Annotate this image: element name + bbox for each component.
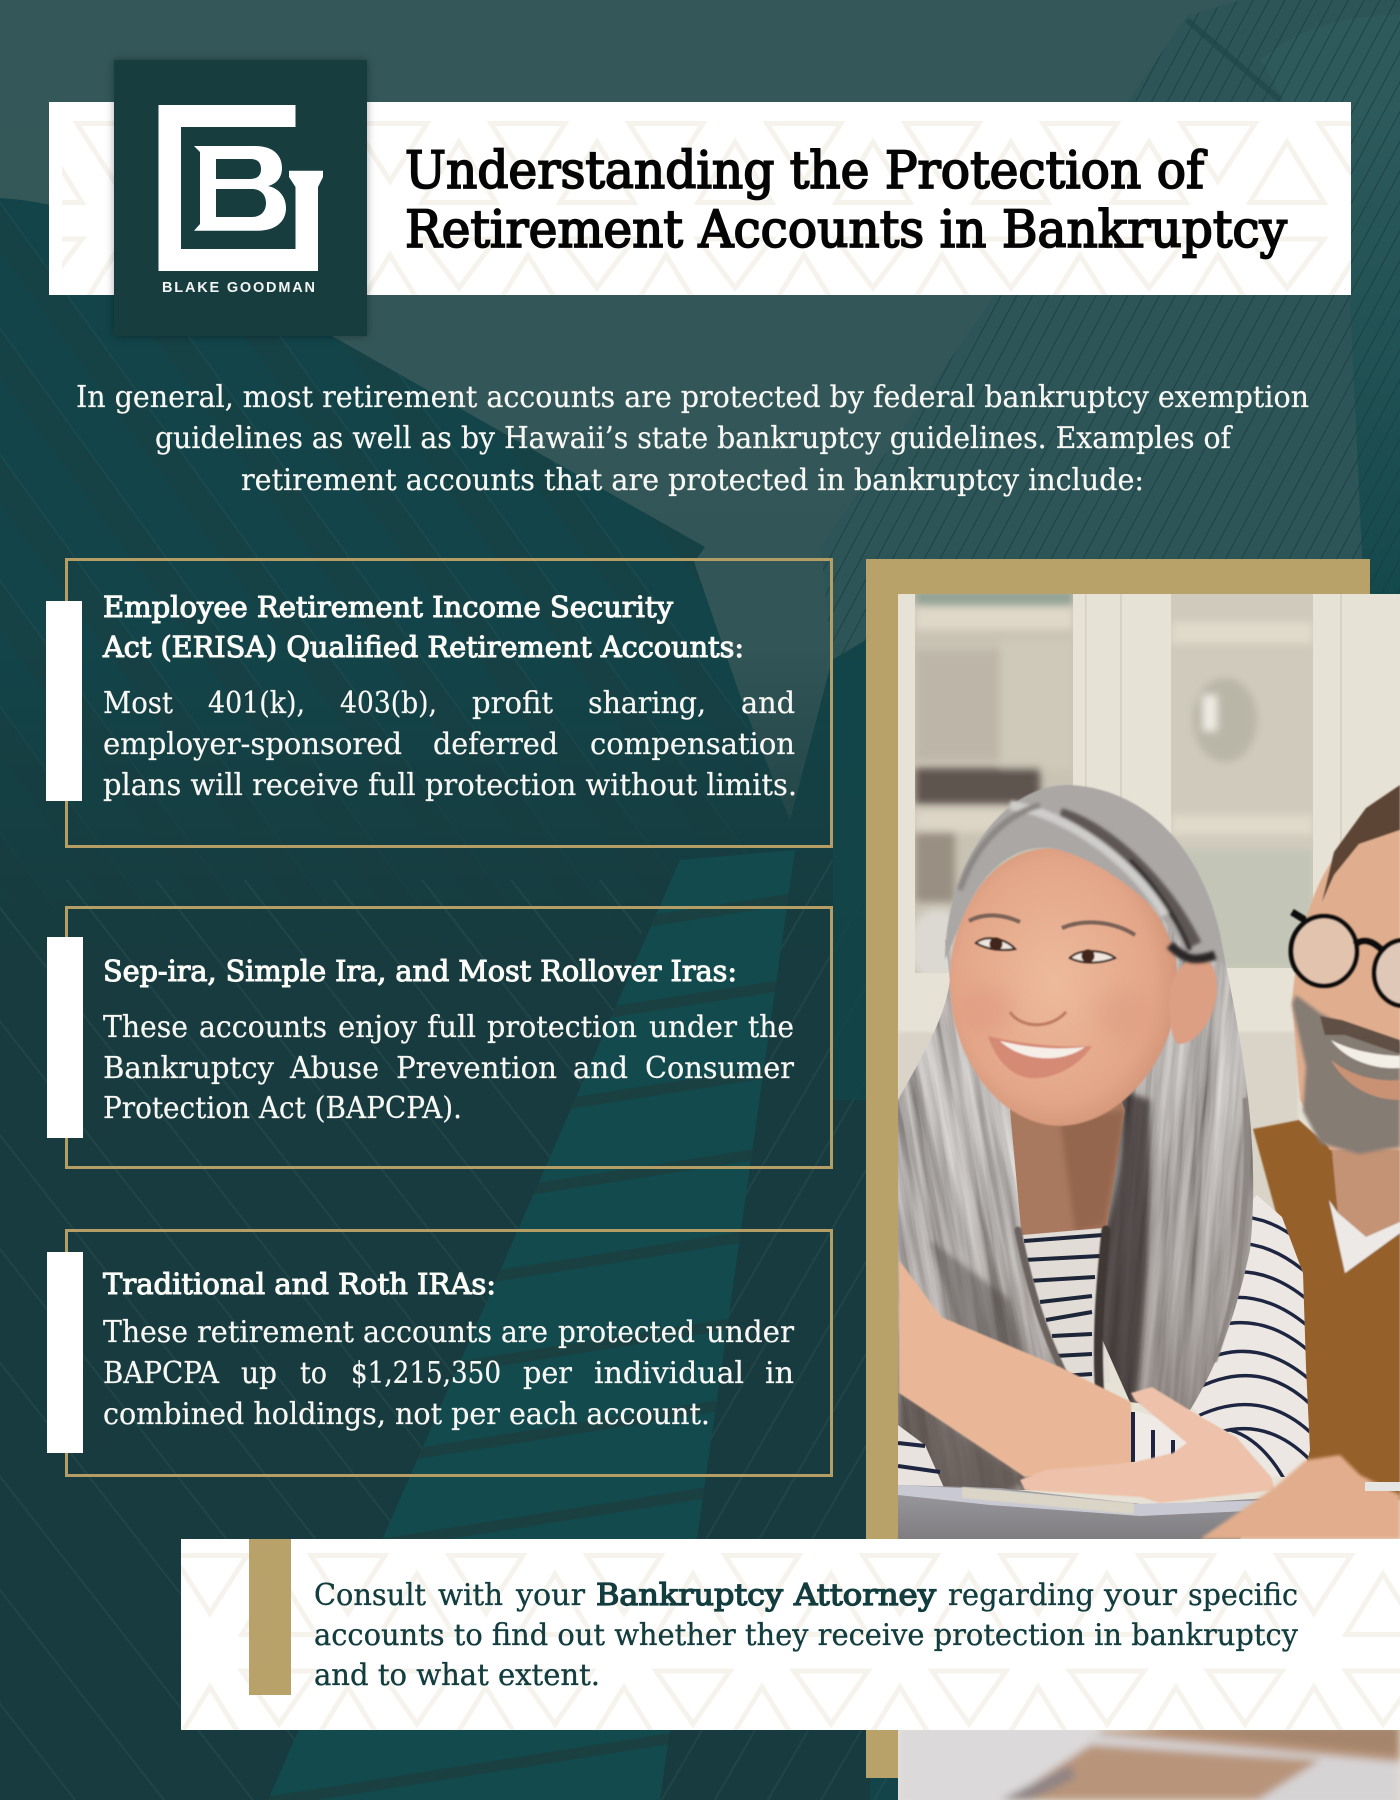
card text: $1,215,350 (351, 1356, 501, 1390)
woman: long grey hair left (898, 940, 1057, 1490)
card text (102, 590, 797, 802)
card text: up (241, 1356, 277, 1390)
title text: Understanding the Protection of (405, 142, 1207, 201)
card: SEP-IRA accounts (47, 906, 833, 1169)
card text: employer-sponsored (103, 727, 402, 761)
card text: Most (103, 686, 173, 720)
card text: These (103, 1315, 188, 1349)
card text: Protection Act (BAPCPA). (103, 1091, 462, 1125)
card text: to (300, 1356, 327, 1390)
photograph (898, 594, 1400, 1800)
card text: accounts (363, 1315, 492, 1349)
card text: Abuse (289, 1051, 379, 1085)
gold accent bar (249, 1539, 291, 1695)
intro paragraph (76, 380, 1309, 497)
card text: sharing, (588, 686, 706, 720)
intro paragraph: guidelines as well as by Hawaii’s state bankruptcy guidelines. Examples of (155, 421, 1233, 455)
kitchen cabinets (908, 590, 1073, 981)
card text: under (649, 1010, 737, 1044)
right building hatched (821, 0, 1400, 900)
card text: full (427, 1010, 476, 1044)
card text: Consumer (645, 1051, 794, 1085)
teal facade (270, 850, 795, 1800)
callout text (314, 1578, 1298, 1692)
callout text: with (438, 1578, 503, 1612)
card text: retirement (197, 1315, 354, 1349)
callout banner: consult your attorney (181, 1539, 1400, 1730)
white accent bar (47, 937, 83, 1138)
card: ERISA accounts (46, 558, 833, 848)
photo panel with gold frame: smiling couple (866, 559, 1400, 1800)
card text: and (741, 686, 795, 720)
intro paragraph: In general, most retirement accounts are protected by federal bankruptcy exemption (76, 380, 1309, 414)
card: Traditional and Roth IRAs (47, 1229, 833, 1477)
callout text: specific (1188, 1578, 1298, 1612)
cuff (1132, 1410, 1190, 1463)
card text: Traditional and Roth IRAs: (103, 1267, 496, 1301)
callout text: accounts to find out whether they receive protection in bankruptcy (314, 1618, 1298, 1652)
card text: combined holdings, not per each account. (103, 1397, 710, 1431)
bottom-left shirt (898, 1425, 945, 1490)
card text: accounts (199, 1010, 327, 1044)
card text: plans will receive full protection without limits. (103, 768, 797, 802)
man's hand (1020, 1387, 1275, 1503)
woman: sleeve (1187, 1195, 1310, 1477)
card text: Bankruptcy (103, 1051, 274, 1085)
lower photo strip: paperwork (898, 1725, 1400, 1800)
card text: enjoy (338, 1010, 417, 1044)
logo: Blake Goodman: BLAKE GOODMAN (162, 280, 315, 296)
card text: in (765, 1356, 794, 1390)
woman: facial features (969, 915, 1135, 1078)
card text: protected (558, 1315, 695, 1349)
card text: and (573, 1051, 628, 1085)
woman: arm (899, 1260, 1134, 1477)
title text: Retirement Accounts in Bankruptcy (405, 201, 1287, 260)
clipboard (898, 1485, 1270, 1539)
callout text: Bankruptcy (596, 1578, 783, 1612)
card text: Act (ERISA) Qualified Retirement Accounts: (102, 630, 744, 664)
white accent bar (46, 601, 82, 801)
card text (102, 1267, 794, 1431)
title banner (49, 102, 1351, 295)
card text: Employee Retirement Income Security (103, 590, 673, 624)
card text: the (748, 1010, 794, 1044)
title text (405, 142, 1287, 260)
callout text: regarding (948, 1578, 1094, 1612)
callout text: Attorney (793, 1578, 936, 1612)
card text: Sep-ira, Simple Ira, and Most Rollover Iras: (103, 954, 737, 988)
gold frame (866, 559, 1370, 1778)
woman: neck and shirt (1010, 1101, 1125, 1236)
card text: under (706, 1315, 794, 1349)
card text: per (523, 1356, 572, 1390)
callout text: and to what extent. (314, 1658, 600, 1692)
logo: Blake Goodman (114, 60, 367, 336)
callout text: Consult (314, 1578, 426, 1612)
card text: Prevention (396, 1051, 557, 1085)
card text: are (501, 1315, 548, 1349)
card text: individual (594, 1356, 744, 1390)
card text (103, 954, 794, 1125)
card text: protection (487, 1010, 637, 1044)
card text: These (103, 1010, 188, 1044)
woman: soft strands over shirt edges (1018, 1100, 1247, 1400)
other hand (1200, 1455, 1400, 1539)
card text: BAPCPA (103, 1356, 220, 1390)
card text: profit (472, 686, 553, 720)
left building (0, 198, 900, 1800)
card text: 403(b), (340, 686, 437, 720)
card text: deferred (433, 727, 558, 761)
man (1253, 785, 1400, 1500)
callout text: your (1103, 1578, 1177, 1612)
intro paragraph: retirement accounts that are protected in bankruptcy include: (241, 463, 1144, 497)
white accent bar (47, 1252, 83, 1453)
card text: 401(k), (208, 686, 305, 720)
callout text: your (515, 1578, 585, 1612)
card text: compensation (590, 727, 795, 761)
woman: long grey hair right (1102, 910, 1254, 1410)
woman: front hair (945, 785, 1225, 965)
woman: face (950, 848, 1178, 1126)
